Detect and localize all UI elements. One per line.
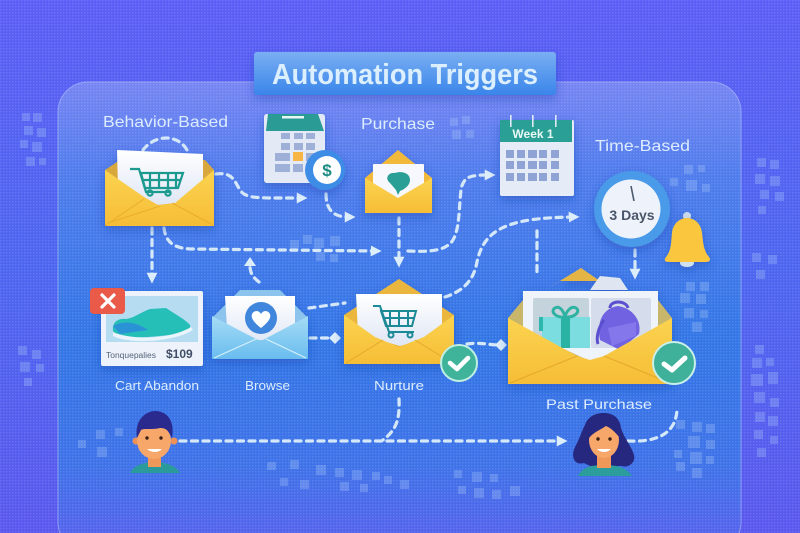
product name: Tonquepalies bbox=[106, 351, 156, 360]
icon: woman avatar bbox=[573, 413, 634, 476]
title banner bbox=[254, 52, 556, 95]
icon: backpack bbox=[597, 302, 640, 350]
icon: clock 3 Days bbox=[594, 171, 670, 247]
icon: man avatar bbox=[130, 411, 180, 473]
decorative pixel clusters bbox=[18, 113, 784, 499]
envelope: Browse bbox=[212, 290, 308, 359]
label: Past Purchase: Past Purchase bbox=[546, 396, 652, 412]
title: Automation Triggers bbox=[272, 59, 538, 91]
label: Nurture: Nurture bbox=[374, 379, 424, 393]
envelope: Nurture bbox=[344, 279, 454, 364]
icon: calendar with dollar badge bbox=[264, 114, 345, 190]
heading: Behavior-Based: Behavior-Based bbox=[103, 114, 228, 131]
icon: calendar Week 1 bbox=[500, 115, 574, 196]
label: Browse: Browse bbox=[245, 379, 290, 393]
Week 1 label: Week 1 bbox=[512, 127, 554, 141]
icon: shopping cart bbox=[373, 306, 416, 338]
dollar sign: $ bbox=[322, 161, 332, 180]
icon: sneaker bbox=[113, 308, 190, 337]
icon: bell bbox=[665, 212, 710, 267]
icon: shopping cart bbox=[130, 169, 183, 196]
icon: nurture check badge bbox=[441, 345, 477, 381]
envelope: Behavior-Based cart bbox=[105, 150, 214, 226]
clock label: 3 Days bbox=[609, 207, 655, 223]
panel: main glass card bbox=[58, 82, 741, 533]
envelope: Purchase bbox=[365, 150, 432, 213]
heading: Time-Based: Time-Based bbox=[595, 138, 690, 155]
arrow tips bbox=[244, 257, 507, 351]
envelope: Past Purchase bbox=[508, 268, 672, 384]
heading: Purchase: Purchase bbox=[361, 116, 435, 133]
icon: past purchase check badge bbox=[653, 342, 695, 384]
dashed flow arrows bbox=[143, 138, 677, 441]
label: Cart Abandon: Cart Abandon bbox=[115, 379, 199, 393]
icon: red X badge bbox=[90, 288, 125, 314]
panel: cart abandon product card bbox=[101, 291, 203, 366]
icon: gift box bbox=[539, 307, 590, 348]
price: $109 bbox=[166, 347, 193, 361]
